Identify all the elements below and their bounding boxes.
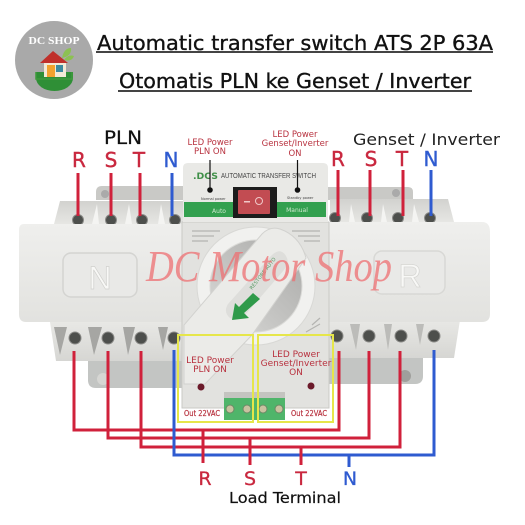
rear mounting plates bbox=[88, 186, 423, 388]
title line 2: Otomatis PLN ke Genset / Inverter bbox=[119, 69, 472, 93]
callout box: Genset/Inverter: Genset/Inverter bbox=[261, 359, 332, 369]
top terminal labels bbox=[72, 147, 438, 172]
top terminal labels: R bbox=[331, 147, 345, 171]
load terminal labels: N bbox=[343, 468, 357, 490]
load wiring bbox=[74, 350, 434, 467]
top control panel: Manual bbox=[286, 207, 308, 214]
top input wires bbox=[78, 170, 431, 216]
label: LED Power Genset/Inverter ON (top): LED Power bbox=[272, 130, 318, 140]
callout box: Genset/Inverter: Out 22VAC bbox=[291, 409, 327, 418]
label: LED Power PLN ON (top): PLN ON bbox=[194, 147, 226, 157]
rocker switch bbox=[233, 187, 277, 218]
watermark: DC Motor Shop bbox=[145, 242, 392, 291]
top terminal blocks bbox=[54, 199, 454, 224]
top control panel: .DCS bbox=[193, 172, 218, 182]
callout box: PLN: PLN ON bbox=[193, 365, 227, 375]
heading: PLN: PLN bbox=[104, 127, 142, 149]
LED leader lines bbox=[208, 160, 300, 192]
top terminal labels: R bbox=[72, 148, 86, 172]
heading: Genset / Inverter: Genset / Inverter bbox=[353, 130, 500, 149]
load terminal labels: R bbox=[198, 468, 212, 490]
label: LED Power Genset/Inverter ON (top): Genset/Inverter bbox=[262, 139, 329, 149]
load terminal labels bbox=[198, 468, 357, 490]
top terminal labels: T bbox=[395, 147, 409, 171]
top control panel: Auto bbox=[212, 208, 226, 215]
bottom terminal screws bbox=[69, 330, 440, 344]
logo: DC Shop: DC SHOP bbox=[28, 36, 80, 47]
logo: DC Shop bbox=[15, 21, 93, 99]
callout box: PLN: Out 22VAC bbox=[184, 409, 220, 418]
label: LED Power Genset/Inverter ON (top): ON bbox=[288, 149, 302, 159]
bottom terminal blocks bbox=[50, 320, 460, 361]
callout box: PLN bbox=[178, 335, 253, 422]
LED indicators bbox=[198, 382, 314, 390]
top control panel: Normal power bbox=[201, 197, 226, 201]
green output terminal bbox=[224, 392, 285, 420]
top terminal screws bbox=[72, 212, 436, 226]
callout box: Genset/Inverter bbox=[258, 335, 333, 422]
rotary handle: RESTORE AUTO bbox=[249, 257, 278, 291]
top terminal labels: T bbox=[132, 148, 146, 172]
label: Load Terminal: Load Terminal bbox=[229, 489, 341, 507]
top control panel: AUTOMATIC TRANSFER SWITCH bbox=[221, 173, 316, 180]
top control panel bbox=[183, 163, 328, 222]
callout box: PLN: LED Power bbox=[186, 356, 234, 366]
load terminal labels: S bbox=[244, 468, 256, 490]
right module R bbox=[328, 222, 490, 322]
right module R: R bbox=[398, 258, 422, 294]
top terminal labels: N bbox=[424, 147, 438, 171]
top terminal labels: S bbox=[105, 148, 117, 172]
label: LED Power PLN ON (top): LED Power bbox=[187, 138, 233, 148]
callout box: Genset/Inverter: ON bbox=[289, 368, 303, 378]
top terminal labels: N bbox=[164, 148, 178, 172]
callout box: Genset/Inverter: LED Power bbox=[272, 350, 320, 360]
left module N: N bbox=[88, 260, 112, 296]
top control panel: Standby power bbox=[287, 196, 314, 200]
title line 1: Automatic transfer switch ATS 2P 63A bbox=[97, 31, 493, 55]
center body bbox=[182, 222, 329, 408]
transfer switch device bbox=[19, 163, 490, 420]
load terminal labels: T bbox=[294, 468, 307, 490]
rotary handle bbox=[184, 227, 320, 384]
top terminal labels: S bbox=[365, 147, 377, 171]
left module N bbox=[19, 224, 184, 322]
